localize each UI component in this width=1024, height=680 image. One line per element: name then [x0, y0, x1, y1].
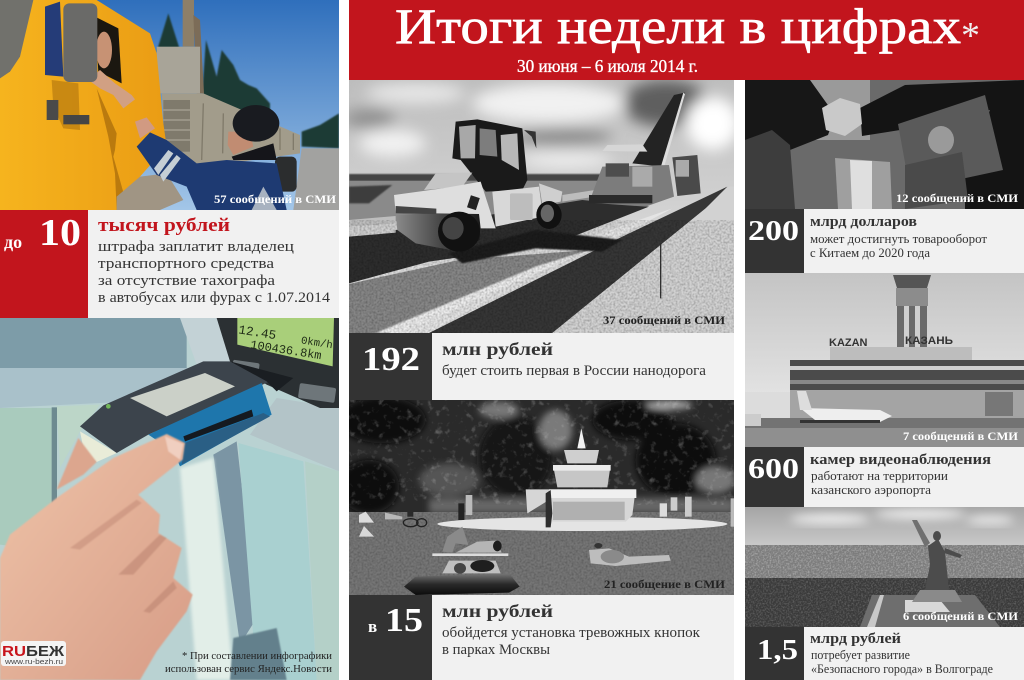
text block: panic buttons cost: млн рублей — [442, 601, 553, 621]
tachograph unit — [217, 318, 339, 408]
text block: fine description: транспортного средства — [98, 256, 274, 272]
text block: fine description: штрафа заплатит владелец — [98, 239, 294, 255]
number block: 200 — [745, 209, 804, 273]
panel: safe city in Volgograd — [745, 627, 1024, 680]
aircraft — [745, 391, 892, 426]
text block: cameras: казанского аэропорта — [811, 483, 931, 497]
asphalt — [349, 200, 649, 283]
panel: panic buttons in parks — [349, 595, 734, 680]
panel: trade with China — [745, 209, 1024, 273]
photo: truck driver and traffic officer — [0, 0, 340, 210]
text block: panic buttons cost: обойдется установка тревожных кнопок — [442, 625, 701, 641]
handshake — [822, 98, 862, 136]
text block: road cost: млн рублей — [442, 339, 553, 359]
caption: 21 messages: 21 сообщение в СМИ — [604, 577, 726, 591]
airport sign: КАЗАНЬ — [905, 335, 953, 347]
clouds — [342, 80, 739, 168]
footnote — [165, 651, 332, 675]
lawn — [349, 512, 734, 595]
text block: fine description: за отсутствие тахографа — [98, 273, 275, 289]
caption: 7 messages: 7 сообщений в СМИ — [903, 429, 1019, 443]
number block: up to 10: 10 — [39, 212, 81, 254]
tachograph unit: 12.45 — [237, 322, 277, 343]
text block: trade turnover: млрд долларов — [810, 214, 917, 230]
logo: Rubezh: RUБЕЖ — [2, 644, 65, 660]
photo: hand holding tachograph card reader — [0, 318, 340, 680]
number block: 600 — [745, 447, 804, 507]
panel: airport cameras — [745, 447, 1024, 507]
caption: 37 messages: 37 сообщений в СМИ — [603, 313, 726, 327]
road — [293, 148, 339, 210]
logo: Rubezh — [1, 641, 66, 666]
text block: fine description — [88, 210, 339, 318]
footnote: использован сервис Яндекс.Новости — [165, 664, 332, 675]
tachograph unit: 100436.8km — [249, 338, 322, 363]
photo: Volgograd panorama with Motherland statue — [745, 507, 1024, 627]
card reader device — [80, 361, 293, 466]
number block: 15: 15 — [385, 602, 423, 639]
text block: cameras: камер видеонаблюдения — [810, 452, 991, 468]
paver and dump truck — [589, 93, 701, 207]
text block: road cost: будет стоить первая в России нанодорога — [442, 363, 707, 379]
terminal — [830, 347, 972, 361]
header banner — [349, 0, 1024, 80]
mirror — [63, 3, 97, 82]
Motherland statue — [912, 520, 962, 602]
photo: Moscow park fountain — [339, 397, 736, 595]
text block: safe city — [804, 627, 1024, 680]
photo: road roller and paver — [342, 80, 739, 333]
text block: cameras — [804, 447, 1024, 507]
text block: safe city: потребует развитие — [811, 648, 910, 662]
number block: 15 — [349, 595, 432, 680]
caption: 6 messages: 6 сообщений в СМИ — [903, 609, 1019, 623]
number block: up to 10: до — [4, 232, 22, 252]
text block: trade turnover — [804, 209, 1024, 273]
date range: 30 июня – 6 июля 2014 г. — [517, 56, 698, 76]
caption: 57 messages: 57 сообщений в СМИ — [214, 192, 337, 206]
number block: 15: в — [368, 617, 377, 636]
officer — [135, 105, 287, 210]
lower strips — [349, 250, 589, 333]
text block: cameras: работают на территории — [811, 469, 948, 483]
text block: road cost — [432, 333, 734, 400]
panel: fine for missing tachograph — [0, 210, 339, 318]
logo: Rubezh: www.ru-bezh.ru — [4, 657, 63, 666]
number block: 1,5: 1,5 — [757, 635, 798, 666]
hand — [0, 434, 193, 680]
text block: panic buttons cost — [432, 595, 734, 680]
number block: 192 — [349, 333, 432, 400]
text block: safe city: «Безопасного города» в Волгограде — [811, 662, 993, 676]
gravel — [552, 205, 734, 333]
field — [349, 181, 606, 221]
footnote: * При составлении инфографики — [182, 651, 332, 662]
text block: fine description: тысяч рублей — [98, 215, 230, 236]
text block: trade turnover: с Китаем до 2020 года — [810, 246, 930, 260]
caption: 12 messages: 12 сообщений в СМИ — [896, 191, 1019, 205]
text block: fine description: в автобусах или фурах с 1.07.2014 — [98, 290, 331, 306]
airport sign — [830, 336, 953, 346]
photo: Kazan airport — [745, 273, 1024, 447]
number block: 1,5 — [745, 627, 804, 680]
number block: 200: 200 — [748, 216, 799, 247]
trailer — [157, 0, 300, 192]
fountain — [526, 428, 636, 522]
airport sign: KAZAN — [829, 337, 868, 349]
tachograph unit: 0km/h — [300, 335, 333, 352]
panel: nano road — [349, 333, 734, 400]
red folder — [898, 95, 1003, 178]
asterisk: * — [961, 15, 980, 57]
text block: panic buttons cost: в парках Москвы — [442, 642, 550, 658]
truck cab — [0, 0, 183, 210]
number block: 600: 600 — [748, 454, 799, 485]
flags — [835, 158, 892, 209]
road roller — [394, 119, 562, 252]
control tower — [893, 275, 931, 348]
people on lawn — [359, 490, 734, 595]
text block: safe city: млрд рублей — [810, 631, 901, 647]
number block: up to 10 — [0, 210, 88, 318]
fountain plaza — [437, 517, 727, 531]
tree line — [157, 13, 339, 148]
photo: handshake and flags — [745, 80, 1024, 209]
number block: 192: 192 — [362, 341, 420, 378]
text block: trade turnover: может достигнуть товарооборот — [810, 232, 988, 246]
